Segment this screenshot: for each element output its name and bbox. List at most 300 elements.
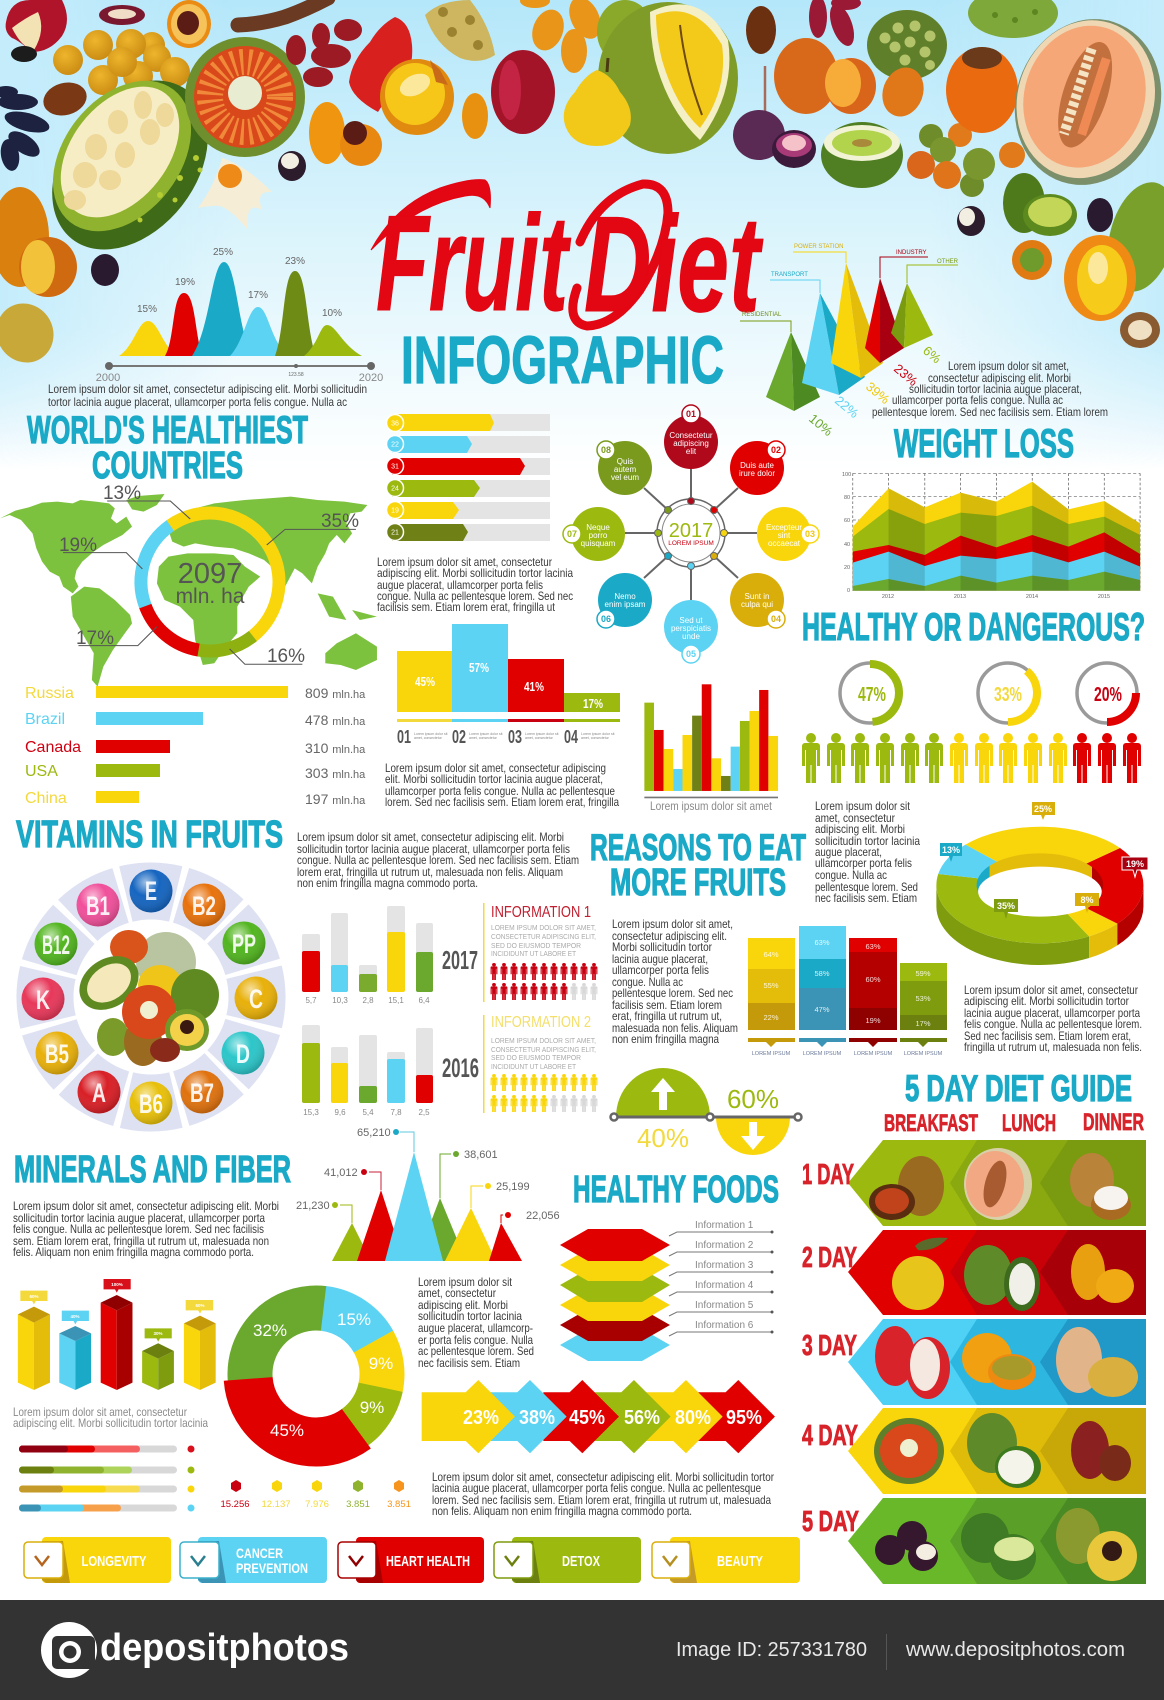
stacked bar chart: 17% [915, 1019, 931, 1028]
text: under arrows: lacinia augue placerat, ullamcorper porta felis congue. Nulla ac pellentesque [432, 1481, 761, 1495]
vitamin balls: D [236, 1039, 250, 1069]
node 02: Duis aute [740, 461, 774, 470]
vitamin balls: K [36, 985, 50, 1015]
stacked bar chart: LOREM IPSUM [904, 1051, 943, 1057]
text: minerals: felis congue. Nulla ac pellentesque lorem. Sed nec facilisis [13, 1222, 264, 1236]
world map [0, 494, 377, 687]
button: detox: DETOX [562, 1553, 600, 1570]
donut chart: 9% [360, 1398, 384, 1417]
text: beside 3D donut: sollicitudin tortor lacinia [815, 834, 920, 848]
hexagon stack: Information 1 [695, 1220, 754, 1231]
pyramid chart: 6% [920, 343, 944, 367]
text: under arrows: Lorem ipsum dolor sit amet, consectetur adipiscing elit. Morbi sollicitudin tortor [432, 1470, 774, 1484]
node 03 [757, 507, 819, 561]
bars: countries: 197 mln.ha [305, 791, 366, 807]
callout 35%: 35% [997, 901, 1015, 911]
horizontal arrow bars: 19 [391, 508, 399, 514]
node 08: vel eum [611, 473, 639, 482]
text: beside 3D donut: Lorem ipsum dolor sit [815, 799, 911, 813]
node 02: 02 [771, 445, 781, 455]
hexagon value legend: 15.256 [220, 1499, 250, 1510]
fruit: durian [597, 0, 738, 154]
stacked bar chart: 58% [814, 969, 830, 978]
text: under arrow bars [377, 555, 573, 614]
text: beside 3D donut [815, 799, 920, 905]
meal column labels [884, 1109, 1144, 1137]
icon: camera logo [41, 1622, 97, 1678]
donut chart: 32% [253, 1321, 287, 1340]
bars: countries: Brazil [25, 711, 65, 728]
vitamin balls: C [249, 984, 263, 1014]
peak chart top left: 2000 [96, 372, 120, 384]
bars: countries: Russia [25, 685, 74, 702]
heading: reasons to eat more fruits: MORE FRUITS [610, 862, 786, 904]
ring chart: 2097 mln ha: 19% [59, 535, 97, 556]
text: beside pyramid chart: Lorem ipsum dolor sit amet, [948, 359, 1069, 373]
vitamin balls: B12 [42, 930, 70, 960]
fruit: lychee [99, 5, 145, 25]
hexagon value legend: 12.137 [261, 1499, 291, 1510]
gauge 20% [1077, 663, 1137, 723]
text: beside donut: adipiscing elit. Morbi [418, 1298, 508, 1312]
text: under arrows: non felis. Aliquam non enim fringilla magna commodo porta. [432, 1504, 692, 1518]
fruit: orange-green cluster [907, 123, 1025, 197]
donut chart: 9% [369, 1354, 393, 1373]
information 2: CONSECTETUR ADIPISCING ELIT, [491, 1045, 596, 1054]
text: beside pyramid chart: ullamcorper porta felis congue. Nulla ac [892, 393, 1063, 407]
fruit: kiwano [1012, 240, 1052, 280]
vitamin balls: B6 [139, 1089, 163, 1119]
vitamin wheel [22, 869, 279, 1125]
fruit: orange with halved fruit [309, 102, 382, 166]
tube chart 2016: 7,8 [390, 1108, 402, 1117]
block bar chart: Lorem ipsum dolor sit [414, 732, 447, 736]
fruit: physalis [198, 158, 272, 230]
hexagon stack: Information 4 [695, 1280, 754, 1291]
text: minerals: sollicitudin tortor lacinia augue placerat, ullamcorper porta [13, 1211, 265, 1225]
text: beside donut: augue placerat, ullamcorp- [418, 1321, 533, 1335]
horizontal arrow bars: 21 [391, 530, 399, 536]
text: beside donut: ac pellentesque lorem. Sed [418, 1344, 534, 1358]
radial diagram 2017: 2017 [669, 520, 713, 542]
area chart: weight loss: 40 [844, 542, 850, 548]
text: under arrow bars: congue. Nulla ac pellentesque lorem. Sed nec [377, 589, 573, 603]
bars: countries: 478 mln.ha [305, 712, 366, 728]
information 1: INFORMATION 1 [491, 904, 591, 921]
node 05 [664, 600, 718, 663]
information 2 [483, 1014, 597, 1113]
isometric bars: 60% [195, 1303, 205, 1308]
fruit: limes [1003, 173, 1077, 236]
fruit: jackfruit [20, 50, 240, 280]
information 1: SED DO EIUSMOD TEMPOR [491, 941, 582, 950]
donut chart: 15% [337, 1310, 371, 1329]
ring chart: 2097 mln ha: mln. ha [176, 585, 245, 608]
text: vitamins intro: sollicitudin tortor lacinia augue placerat, ullamcorper porta felis [297, 842, 570, 856]
heading: world's healthiest countries: WORLD'S HEALTHIEST [27, 409, 308, 452]
text: beside pyramid chart: consectetur adipiscing elit. Morbi [928, 371, 1071, 385]
ring chart: 2097 mln ha: 2097 [178, 558, 242, 590]
tube chart 2017: 15,1 [388, 996, 404, 1005]
text: minerals: felis. Aliquam non enim fringilla magna commodo porta. [13, 1245, 254, 1259]
text: under arrow bars: augue placerat, ullamcorper porta felis [377, 578, 543, 592]
text: beside donut [418, 1275, 534, 1370]
node 03: sint [778, 531, 791, 540]
triangle peak chart [296, 1127, 560, 1261]
people row [802, 733, 1141, 783]
fruit: golden pinecone fruit [425, 0, 495, 61]
horizontal arrow bars: 36 [391, 420, 399, 428]
meal column labels: BREAKFAST [884, 1110, 978, 1137]
pyramid chart: 39% [863, 379, 893, 407]
gauge 47% [840, 663, 900, 723]
node 08 [597, 441, 652, 495]
day 2 row [802, 1230, 1146, 1315]
stacked bar chart: 19% [865, 1016, 881, 1025]
block bar chart: Lorem ipsum dolor sit [525, 732, 558, 736]
vitamin balls: B2 [192, 891, 216, 921]
node 04 [730, 573, 785, 628]
stacked bar chart: 55% [763, 981, 779, 990]
tube chart 2016: 5,4 [362, 1108, 374, 1117]
area chart: weight loss: 2012 [882, 594, 894, 600]
pyramid chart: POWER STATION [794, 244, 843, 250]
callout 19%: 19% [1126, 859, 1144, 869]
text: under peak chart [48, 382, 367, 409]
text: reasons: ullamcorper porta felis [612, 963, 709, 977]
text: beside pyramid chart [872, 359, 1108, 419]
stacked bar chart [748, 926, 947, 1057]
gauge 20%: 20% [1094, 684, 1122, 706]
ring chart: 2097 mln ha: 17% [76, 628, 114, 649]
tube chart 2017: 2,8 [362, 996, 374, 1005]
day 5 row: 5 DAY [802, 1506, 859, 1538]
fruit: halved orange fruit [167, 0, 211, 48]
percentage arrows: 38% [519, 1407, 555, 1429]
stacked bar chart: 47% [814, 1005, 830, 1014]
node 05: perspiciatis [671, 624, 711, 633]
stacked bar chart: LOREM IPSUM [803, 1051, 842, 1057]
day 4 row [802, 1408, 1146, 1494]
fruit: dark berry right [1087, 198, 1113, 232]
node 06: enim ipsam [605, 600, 646, 609]
node 08: autem [614, 465, 636, 474]
node 05: 05 [686, 649, 696, 659]
peak chart top left: 15% [137, 304, 157, 315]
vitamin balls: A [92, 1078, 106, 1108]
percentage arrows: 95% [726, 1407, 762, 1429]
isometric bars: 60% [29, 1294, 39, 1299]
meal column labels: LUNCH [1002, 1110, 1056, 1137]
hexagon value legend: 3.851 [387, 1499, 411, 1510]
up and down gauge [610, 1068, 802, 1155]
fruit: dark round berry [91, 254, 119, 286]
block bar chart [397, 624, 620, 747]
block bar chart: 41% [524, 679, 544, 694]
area chart: weight loss: 0 [847, 588, 850, 594]
radial diagram 2017: LOREM IPSUM [668, 540, 714, 547]
multicolor bar chart [644, 684, 778, 813]
multicolor bar chart: Lorem ipsum dolor sit amet [650, 799, 773, 813]
stacked bar chart: 64% [763, 950, 779, 959]
up and down gauge: 40% [637, 1123, 689, 1153]
peak chart top left: 17% [248, 290, 268, 301]
percentage arrows [422, 1380, 775, 1453]
tube chart 2016: 2016 [442, 1053, 479, 1083]
fruit: dark crimson fruit [491, 50, 555, 134]
node 01: 01 [686, 409, 696, 419]
isometric bars: 40% [70, 1314, 80, 1319]
node 01: adipiscing [673, 439, 709, 448]
website url: www.depositphotos.com [905, 1639, 1125, 1661]
information 2: SED DO EIUSMOD TEMPOR [491, 1053, 582, 1062]
text: vitamins intro: lorem erat, fringilla ut rutrum ut, malesuada non felis. Aliquam [297, 865, 563, 879]
vitamin balls: B5 [45, 1039, 69, 1069]
block bar chart: 01 [397, 727, 411, 747]
stacked bar chart: 59% [915, 969, 931, 978]
area chart: weight loss: 20 [844, 565, 850, 571]
hexagon stack: Information 2 [695, 1240, 754, 1251]
heading: world's healthiest countries: COUNTRIES [92, 445, 243, 487]
stacked bar chart: 22% [763, 1013, 779, 1022]
fruit: spiked orange [876, 62, 930, 122]
vitamin balls: E [145, 876, 157, 906]
heading: vitamins in fruits: VITAMINS IN FRUITS [16, 814, 283, 856]
fruit: bergamot [821, 122, 903, 188]
peak chart top left: 23% [285, 256, 305, 267]
text: under block bar chart [385, 761, 619, 809]
text: reasons: facilisis sem. Etiam lorem [612, 998, 722, 1012]
text: under 3D donut [964, 983, 1142, 1054]
text: vitamins intro: Lorem ipsum dolor sit amet, consectetur adipiscing elit. Morbi [297, 830, 564, 844]
stacked bar chart: 53% [915, 994, 931, 1003]
text: reasons: lacinia augue placerat, [612, 952, 708, 966]
horizontal arrow bars: 24 [391, 486, 399, 492]
ring chart: 2097 mln ha: 16% [267, 646, 305, 667]
tube chart 2017: 5,7 [305, 996, 317, 1005]
node 03: 03 [805, 529, 815, 539]
text: under arrow bars: Lorem ipsum dolor sit amet, consectetur [377, 555, 552, 569]
donut chart: 45% [270, 1421, 304, 1440]
callout 8% [1075, 893, 1099, 913]
text: reasons: erat, fringilla ut rutrum ut, [612, 1009, 722, 1023]
fruit: yellow pear [564, 58, 631, 146]
text: beside 3D donut: pellentesque lorem. Sed [815, 880, 918, 894]
background [0, 0, 1164, 456]
horizontal arrow bars: 31 [391, 464, 399, 470]
isometric bars [18, 1279, 216, 1390]
stacked bar chart: 63% [814, 938, 830, 947]
day 3 row: 3 DAY [802, 1330, 857, 1362]
text: under arrow bars: facilisis sem. Etiam lorem erat, fringilla ut [377, 600, 556, 614]
3D donut chart [936, 802, 1148, 965]
day 4 row: 4 DAY [802, 1420, 858, 1452]
callout 8%: 8% [1080, 895, 1094, 905]
text: vitamins intro: congue. Nulla ac pellentesque lorem. Sed nec facilisis sem. Etiam [297, 853, 579, 867]
ring chart: 2097 mln ha [59, 483, 359, 679]
node 02: irure dolor [739, 469, 775, 478]
isometric bars: 100% [111, 1282, 123, 1287]
text: beside 3D donut: adipiscing elit. Morbi [815, 822, 905, 836]
block bar chart: 45% [415, 674, 435, 689]
callout 13% [940, 843, 962, 862]
hexagon value legend: 7.976 [305, 1499, 329, 1510]
node 06: Nemo [614, 592, 636, 601]
bars: countries: 310 mln.ha [305, 740, 366, 756]
tube chart 2016: 2,5 [418, 1108, 430, 1117]
tube chart 2017: 2017 [442, 945, 478, 975]
node 08: Quis [617, 457, 633, 466]
tube chart 2016 [302, 1025, 479, 1117]
fruit border illustrations [0, 0, 1164, 373]
gauge 33%: 33% [994, 684, 1022, 706]
fruit pile [69, 930, 219, 1066]
fruit: red flower fruit [6, 0, 67, 62]
area chart: weight loss: 2015 [1098, 594, 1110, 600]
text: reasons: pellentesque lorem. Sed nec [612, 986, 733, 1000]
button: beauty [652, 1537, 800, 1583]
title: INFOGRAPHIC: INFOGRAPHIC [401, 323, 724, 398]
fruit: brown seed [40, 78, 90, 120]
button: beauty: BEAUTY [717, 1553, 763, 1570]
text: minerals: Lorem ipsum dolor sit amet, consectetur adipiscing elit. Morbi [13, 1199, 279, 1213]
pyramid chart: RESIDENTIAL [742, 312, 782, 318]
fruit: golden cluster [53, 29, 190, 95]
node 04: culpa qui [741, 600, 773, 609]
fruit: wax apple [349, 17, 412, 112]
text: beside donut: sollicitudin tortor lacinia [418, 1309, 522, 1323]
node 04: 04 [771, 614, 781, 624]
information 2: INCIDIDUNT UT LABORE ET [491, 1062, 576, 1071]
text: under block bar chart: Lorem ipsum dolor sit amet, consectetur adipiscing [385, 761, 606, 775]
fruit: custard apple right [1097, 175, 1164, 299]
tube chart 2016: 9,6 [334, 1108, 346, 1117]
pyramid chart: 10% [806, 411, 836, 439]
bars: countries: Canada [25, 739, 81, 756]
block bar chart: Lorem ipsum dolor sit [469, 732, 502, 736]
stacked bar chart: LOREM IPSUM [854, 1051, 893, 1057]
triangle peak chart: 21,230 [296, 1200, 330, 1212]
radial diagram 2017 [563, 405, 819, 663]
text: under block bar chart: elit. Morbi sollicitudin tortor lacinia augue placerat, [385, 772, 603, 786]
day 2 row: 2 DAY [802, 1242, 857, 1274]
text: gray caption [13, 1405, 208, 1430]
text: beside 3D donut: ullamcorper porta felis [815, 856, 912, 870]
hexagon value legend [220, 1480, 411, 1510]
callout 19% [1122, 857, 1148, 877]
text: under 3D donut: adipiscing elit. Morbi sollicitudin tortor [964, 994, 1129, 1008]
text: vitamins intro [297, 830, 579, 890]
gauges [840, 652, 1137, 734]
node 03: occaecat [768, 539, 801, 548]
fruit: golden pinecone left [0, 293, 64, 373]
node 08: 08 [601, 445, 611, 455]
fruit: red-orange round fruit [185, 37, 305, 157]
node 03: Excepteur [766, 523, 802, 532]
button: longevity: LONGEVITY [82, 1553, 146, 1570]
horizontal arrow bars: 22 [391, 442, 399, 448]
area chart: weight loss: 2014 [1026, 594, 1038, 600]
day 1 row [802, 1140, 1146, 1226]
heading: world's healthiest countries [27, 409, 308, 487]
text: reasons: congue. Nulla ac [612, 975, 683, 989]
tube chart 2016: 15,3 [303, 1108, 319, 1117]
node 06 [597, 573, 652, 628]
text: reasons: malesuada non felis. Aliquam [612, 1021, 738, 1035]
information 1 [483, 903, 597, 1002]
isometric bars: 30% [153, 1331, 163, 1336]
peak chart top left: 25% [213, 247, 233, 258]
fruit: tamarind [238, 0, 328, 25]
day 3 row [802, 1319, 1146, 1405]
node 05: Sed ut [679, 616, 703, 625]
ring chart: 2097 mln ha: 13% [103, 483, 141, 504]
peak chart top left: 123.58 [288, 372, 304, 378]
fruit: red grapes [286, 19, 362, 87]
triangle peak chart: 38,601 [464, 1149, 498, 1161]
text: under peak chart: tortor lacinia augue placerat, ullamcorper porta felis congue. Nulla ac [48, 395, 347, 409]
tube chart 2017: 6,4 [418, 996, 430, 1005]
button: heart health [338, 1537, 484, 1583]
node 07 [563, 507, 625, 561]
information 1: INCIDIDUNT UT LABORE ET [491, 949, 576, 958]
text: beside 3D donut: congue. Nulla ac [815, 868, 887, 882]
block bar chart: amet, consectetur [469, 736, 498, 740]
node 07: quisquam [581, 539, 616, 548]
logo wordmark: depositphotos [100, 1627, 349, 1669]
tube chart 2017 [302, 906, 478, 1005]
button: cancer prevention: PREVENTION [236, 1560, 308, 1576]
heading: minerals and fiber: MINERALS AND FIBER [14, 1149, 291, 1191]
percentage arrows: 56% [624, 1407, 660, 1429]
node 07: porro [589, 531, 608, 540]
hexagon stack: Information 5 [695, 1300, 754, 1311]
ring chart: 2097 mln ha: 35% [321, 511, 359, 532]
vitamin balls [22, 870, 278, 1124]
area chart: weight loss: 80 [844, 495, 850, 501]
gauge 47%: 47% [858, 684, 886, 706]
text: minerals: sem. Etiam lorem erat, fringilla ut rutrum ut, malesuada non [13, 1234, 269, 1248]
block bar chart: Lorem ipsum dolor sit [581, 732, 614, 736]
horizontal arrow bars [386, 414, 550, 541]
fruit: orange dates [520, 0, 607, 73]
button: detox [494, 1537, 641, 1583]
fruit: red beans [809, 0, 861, 49]
vitamin balls: B1 [86, 891, 110, 921]
hexagon stack: Information 3 [695, 1260, 754, 1271]
fruit: purple mangosteen [733, 66, 816, 168]
progress bars [19, 1446, 194, 1512]
fruit: brown small fruit [1120, 312, 1160, 348]
block bar chart: amet, consectetur [581, 736, 610, 740]
button: cancer prevention [180, 1537, 327, 1583]
button: heart health: HEART HEALTH [386, 1553, 470, 1570]
vitamin balls: PP [232, 929, 256, 959]
text: beside 3D donut: nec facilisis sem. Etiam [815, 891, 917, 905]
fruit: cut orange-yellow fruit right [1064, 235, 1136, 321]
up and down gauge: 60% [727, 1084, 779, 1114]
text: beside donut: amet, consectetur [418, 1286, 496, 1300]
pyramid chart: TRANSPORT [771, 272, 808, 278]
block bar chart: 17% [583, 696, 603, 711]
node 01: Consectetur [669, 431, 713, 440]
bars: countries: 809 mln.ha [305, 685, 366, 701]
node 06: 06 [601, 614, 611, 624]
pyramid chart: 22% [832, 393, 862, 421]
information 2: INFORMATION 2 [491, 1014, 591, 1031]
image id: Image ID: 257331780 [676, 1639, 867, 1661]
bars: countries: USA [25, 763, 58, 780]
